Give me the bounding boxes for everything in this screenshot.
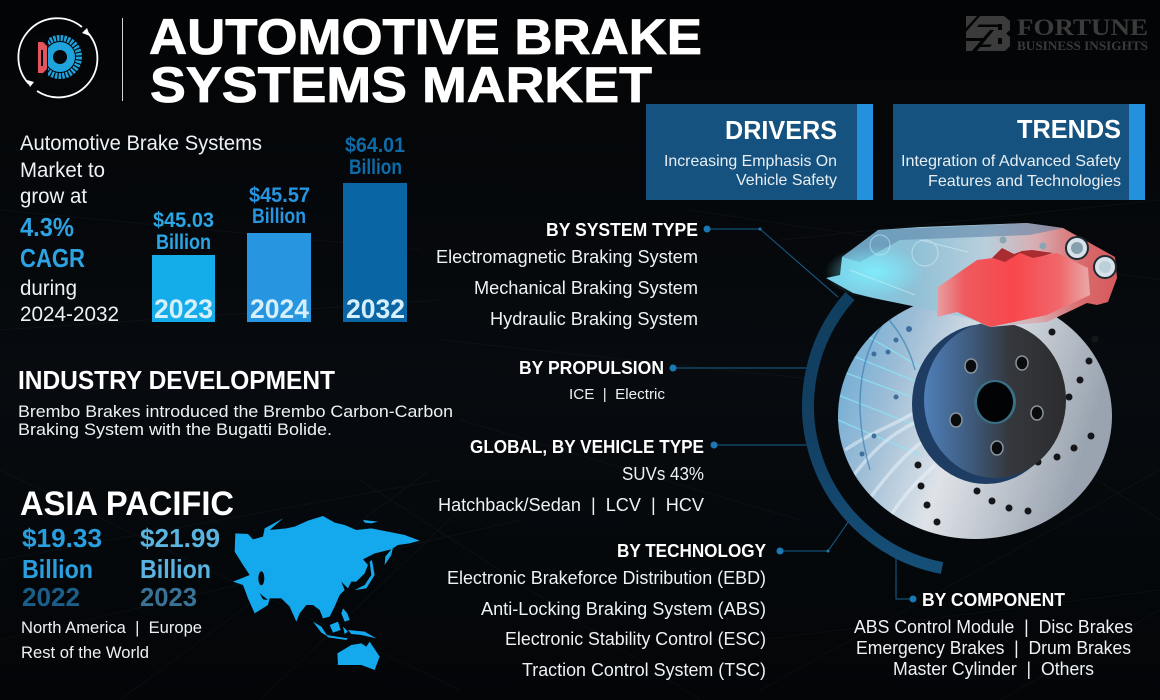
- panel: drivers: DRIVERS: [725, 115, 837, 145]
- category: by system type: [436, 220, 698, 329]
- panel: trends: Integration of Advanced Safety: [901, 153, 1121, 170]
- category: by technology: [447, 541, 766, 680]
- title: [149, 9, 702, 113]
- bar 2032: 2032: [346, 294, 405, 324]
- panel: Asia Pacific: $21.99: [140, 523, 220, 553]
- bar chart: market size: [152, 134, 407, 324]
- title: AUTOMOTIVE BRAKE: [149, 9, 702, 65]
- panel: drivers: [646, 104, 873, 200]
- panel: drivers: Vehicle Safety: [736, 172, 837, 189]
- panel: Asia Pacific: 2023: [140, 582, 197, 612]
- logo: Fortune Business Insights: [965, 15, 1148, 53]
- logo: Fortune Business Insights: BUSINESS INSIGHTS: [1017, 38, 1148, 53]
- category: by system type: Hydraulic Braking System: [490, 309, 698, 329]
- panel: Asia Pacific: 2022: [22, 582, 80, 612]
- icon: brake disc in rotating ring: [18, 18, 97, 97]
- text block: CAGR: Automotive Brake Systems: [20, 132, 262, 155]
- text block: CAGR: 2024-2032: [20, 303, 119, 326]
- panel: trends: [893, 104, 1145, 200]
- caliper: [825, 223, 1117, 327]
- panel: Asia Pacific: North America | Europe: [21, 618, 202, 637]
- panel: Asia Pacific: Rest of the World: [21, 643, 149, 662]
- panel: trends: Features and Technologies: [928, 173, 1121, 190]
- category: by technology: Electronic Stability Control (ESC): [505, 629, 766, 649]
- category: by vehicle type: SUVs 43%: [622, 464, 704, 484]
- arc around brake disc: [808, 296, 942, 568]
- bar 2023: $45.03: [153, 209, 214, 232]
- category: by vehicle type: [438, 437, 704, 515]
- divider: [122, 18, 123, 101]
- category: by technology: Anti-Locking Braking System (ABS): [481, 599, 766, 619]
- category: by component: ABS Control Module | Disc Brakes: [854, 617, 1133, 637]
- panel: industry development: [18, 365, 453, 439]
- bar 2032: $64.01: [345, 134, 405, 157]
- disc: [838, 293, 1112, 539]
- logo: Fortune Business Insights: FORTUNE: [1017, 15, 1148, 40]
- text block: CAGR: Market to: [20, 159, 105, 182]
- category: by propulsion: BY PROPULSION: [519, 358, 664, 378]
- category: by component: Emergency Brakes | Drum Brakes: [856, 638, 1131, 658]
- category: by propulsion: ICE | Electric: [569, 386, 666, 403]
- panel: drivers: Increasing Emphasis On: [664, 153, 837, 170]
- category: by system type: BY SYSTEM TYPE: [546, 220, 698, 240]
- bar 2032: [343, 134, 407, 324]
- panel: Asia Pacific: Billion: [22, 554, 93, 584]
- text block: CAGR: [20, 132, 262, 326]
- text block: CAGR: during: [20, 277, 77, 300]
- bar 2032: Billion: [349, 156, 402, 179]
- hub: [912, 322, 1066, 484]
- panel: Asia Pacific: $19.33: [22, 523, 102, 553]
- bar 2024: 2024: [250, 294, 309, 324]
- category: by technology: BY TECHNOLOGY: [617, 541, 766, 561]
- bar 2023: 2023: [154, 294, 213, 324]
- panel: industry development: Brembo Brakes introduced the Brembo Carbon-Carbon: [18, 402, 453, 421]
- panel: Asia Pacific: [20, 485, 234, 662]
- connector lines: [670, 226, 916, 602]
- category: by technology: Traction Control System (TSC): [522, 660, 766, 680]
- category: by component: Master Cylinder | Others: [893, 659, 1094, 679]
- illustration: brake disc and caliper: [825, 223, 1117, 539]
- text block: CAGR: CAGR: [20, 243, 85, 273]
- category: by propulsion: [519, 358, 666, 403]
- category: by vehicle type: Hatchback/Sedan | LCV | HCV: [438, 495, 704, 515]
- category: by system type: Electromagnetic Braking System: [436, 247, 698, 267]
- title: SYSTEMS MARKET: [150, 57, 652, 113]
- category: by component: BY COMPONENT: [922, 590, 1065, 610]
- text block: CAGR: grow at: [20, 185, 87, 208]
- category: by technology: Electronic Brakeforce Distribution (EBD): [447, 568, 766, 588]
- bar 2023: Billion: [156, 231, 211, 254]
- bar 2024: $45.57: [249, 184, 310, 207]
- map: Asia Pacific: [233, 516, 420, 670]
- category: by component: [854, 590, 1133, 679]
- category: by vehicle type: GLOBAL, BY VEHICLE TYPE: [470, 437, 704, 457]
- panel: Asia Pacific: ASIA PACIFIC: [20, 485, 234, 523]
- panel: trends: TRENDS: [1017, 114, 1121, 144]
- text block: CAGR: 4.3%: [20, 212, 74, 242]
- bar 2024: Billion: [252, 205, 306, 228]
- panel: industry development: Braking System with the Bugatti Bolide.: [18, 420, 332, 439]
- panel: industry development: INDUSTRY DEVELOPMENT: [18, 365, 335, 395]
- bar 2023: [152, 209, 215, 324]
- category: by system type: Mechanical Braking System: [474, 278, 698, 298]
- panel: Asia Pacific: Billion: [140, 554, 211, 584]
- bar 2024: [247, 184, 311, 324]
